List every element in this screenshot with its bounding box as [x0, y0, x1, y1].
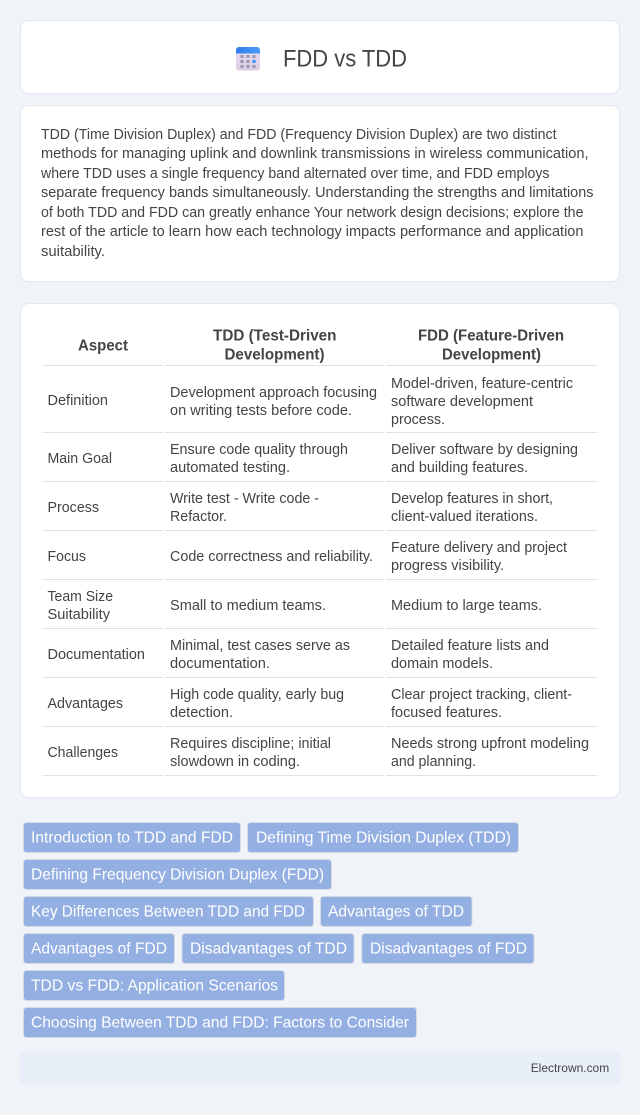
button: [320, 896, 472, 926]
button: [24, 860, 332, 890]
row: Challenges: slowdown in coding.: [170, 754, 300, 770]
row: Team Size Suitability: [48, 589, 542, 623]
button: Defining Time Division Duplex (TDD): [256, 830, 511, 846]
row: Definition: software development: [391, 394, 533, 410]
row: Main Goal: and building features.: [391, 460, 528, 476]
row: Documentation: [48, 638, 549, 672]
comparison table panel: [20, 304, 620, 798]
intro text panel: where TDD uses a single frequency band alternated over time, and FDD employs: [40, 166, 549, 182]
intro text panel: suitability.: [41, 244, 105, 260]
row: Process: [48, 491, 553, 525]
button: Advantages of FDD: [31, 940, 167, 958]
button: [24, 822, 240, 852]
row: Process: Develop features in short,: [391, 491, 553, 507]
row: Team Size Suitability: Small to medium teams.: [170, 598, 326, 614]
row: Main Goal: Main Goal: [48, 451, 112, 467]
row: Advantages: Clear project tracking, client-: [391, 687, 572, 703]
row: Team Size Suitability: Medium to large teams.: [391, 598, 542, 614]
button: [24, 970, 284, 1000]
row: Challenges: Needs strong upfront modeling: [391, 736, 589, 752]
intro text panel: of both TDD and FDD can greatly enhance Your network design decisions; explore the: [41, 205, 584, 221]
button: TDD vs FDD: Application Scenarios: [31, 978, 278, 994]
button: Key Differences Between TDD and FDD: [31, 904, 305, 920]
row: Definition: Definition: [48, 393, 108, 409]
intro text panel: rest of the article to learn how each technology impacts performance and application: [41, 224, 584, 240]
button: Disadvantages of FDD: [370, 940, 527, 958]
row: Advantages: detection.: [170, 705, 233, 721]
button: Advantages of TDD: [328, 904, 464, 920]
row: Team Size Suitability: Team Size: [48, 589, 113, 605]
row: Definition: process.: [391, 412, 445, 428]
row: Advantages: High code quality, early bug: [170, 687, 344, 703]
row: Team Size Suitability: Suitability: [48, 607, 111, 623]
table header: TDD (Test-Driven: [213, 328, 336, 344]
row: Focus: [48, 540, 567, 574]
row: Definition: on writing tests before code.: [170, 403, 352, 419]
table header: Development): [442, 346, 541, 364]
button: Disadvantages of TDD: [190, 940, 347, 958]
intro text panel: [20, 106, 620, 282]
row: Documentation: Detailed feature lists and: [391, 638, 549, 654]
button: [182, 934, 354, 964]
button: [248, 822, 518, 852]
row: Process: client-valued iterations.: [391, 509, 538, 525]
row: Definition: Development approach focusing: [170, 385, 377, 401]
row: Challenges: [48, 736, 589, 770]
row: Definition: [48, 376, 573, 428]
icon: calendar: [236, 47, 260, 70]
footer: Electrown.com: [531, 1061, 609, 1075]
button: [24, 934, 174, 964]
table header: Development): [224, 346, 324, 364]
row: Focus: Code correctness and reliability.: [170, 549, 373, 565]
row: Main Goal: automated testing.: [170, 460, 290, 476]
row: Process: Write test - Write code -: [170, 491, 319, 507]
row: Process: Process: [48, 500, 99, 516]
row: Advantages: focused features.: [391, 705, 502, 721]
header card: [20, 20, 620, 94]
button: [24, 896, 314, 926]
button: Introduction to TDD and FDD: [31, 830, 233, 846]
row: Advantages: Advantages: [48, 696, 123, 712]
row: Process: Refactor.: [170, 509, 227, 525]
button: [362, 934, 534, 964]
row: Documentation: Documentation: [48, 647, 145, 663]
table header: [78, 328, 564, 364]
button: [24, 1008, 416, 1038]
row: Focus: Focus: [48, 549, 86, 565]
row: Main Goal: [48, 442, 578, 476]
row: Documentation: Minimal, test cases serve as: [170, 638, 350, 654]
row: Documentation: documentation.: [170, 656, 270, 672]
intro text panel: separate frequency bands simultaneously. Understanding the strengths and limitations: [41, 185, 594, 201]
table header: Aspect: [78, 338, 129, 354]
row: Challenges: Challenges: [48, 745, 118, 761]
row: Focus: Feature delivery and project: [391, 540, 567, 556]
intro text panel: TDD (Time Division Duplex) and FDD (Frequency Division Duplex) are two distinct: [41, 127, 557, 143]
button: Defining Frequency Division Duplex (FDD): [31, 866, 324, 884]
row: Challenges: and planning.: [391, 754, 476, 770]
row: Main Goal: Ensure code quality through: [170, 442, 348, 458]
footer: [20, 1051, 620, 1085]
row: Focus: progress visibility.: [391, 558, 504, 574]
row: Definition: Model-driven, feature-centric: [391, 376, 573, 392]
row: Challenges: Requires discipline; initial: [170, 736, 331, 752]
row: Advantages: [48, 687, 572, 721]
title: FDD vs TDD: [283, 46, 407, 72]
topic link buttons: [24, 822, 534, 1038]
table header: FDD (Feature-Driven: [418, 328, 564, 344]
intro text panel: methods for managing uplink and downlink transmissions in wireless communication,: [41, 146, 588, 162]
button: Choosing Between TDD and FDD: Factors to Consider: [31, 1014, 410, 1032]
row: Documentation: domain models.: [391, 656, 493, 672]
row: Main Goal: Deliver software by designing: [391, 442, 578, 458]
